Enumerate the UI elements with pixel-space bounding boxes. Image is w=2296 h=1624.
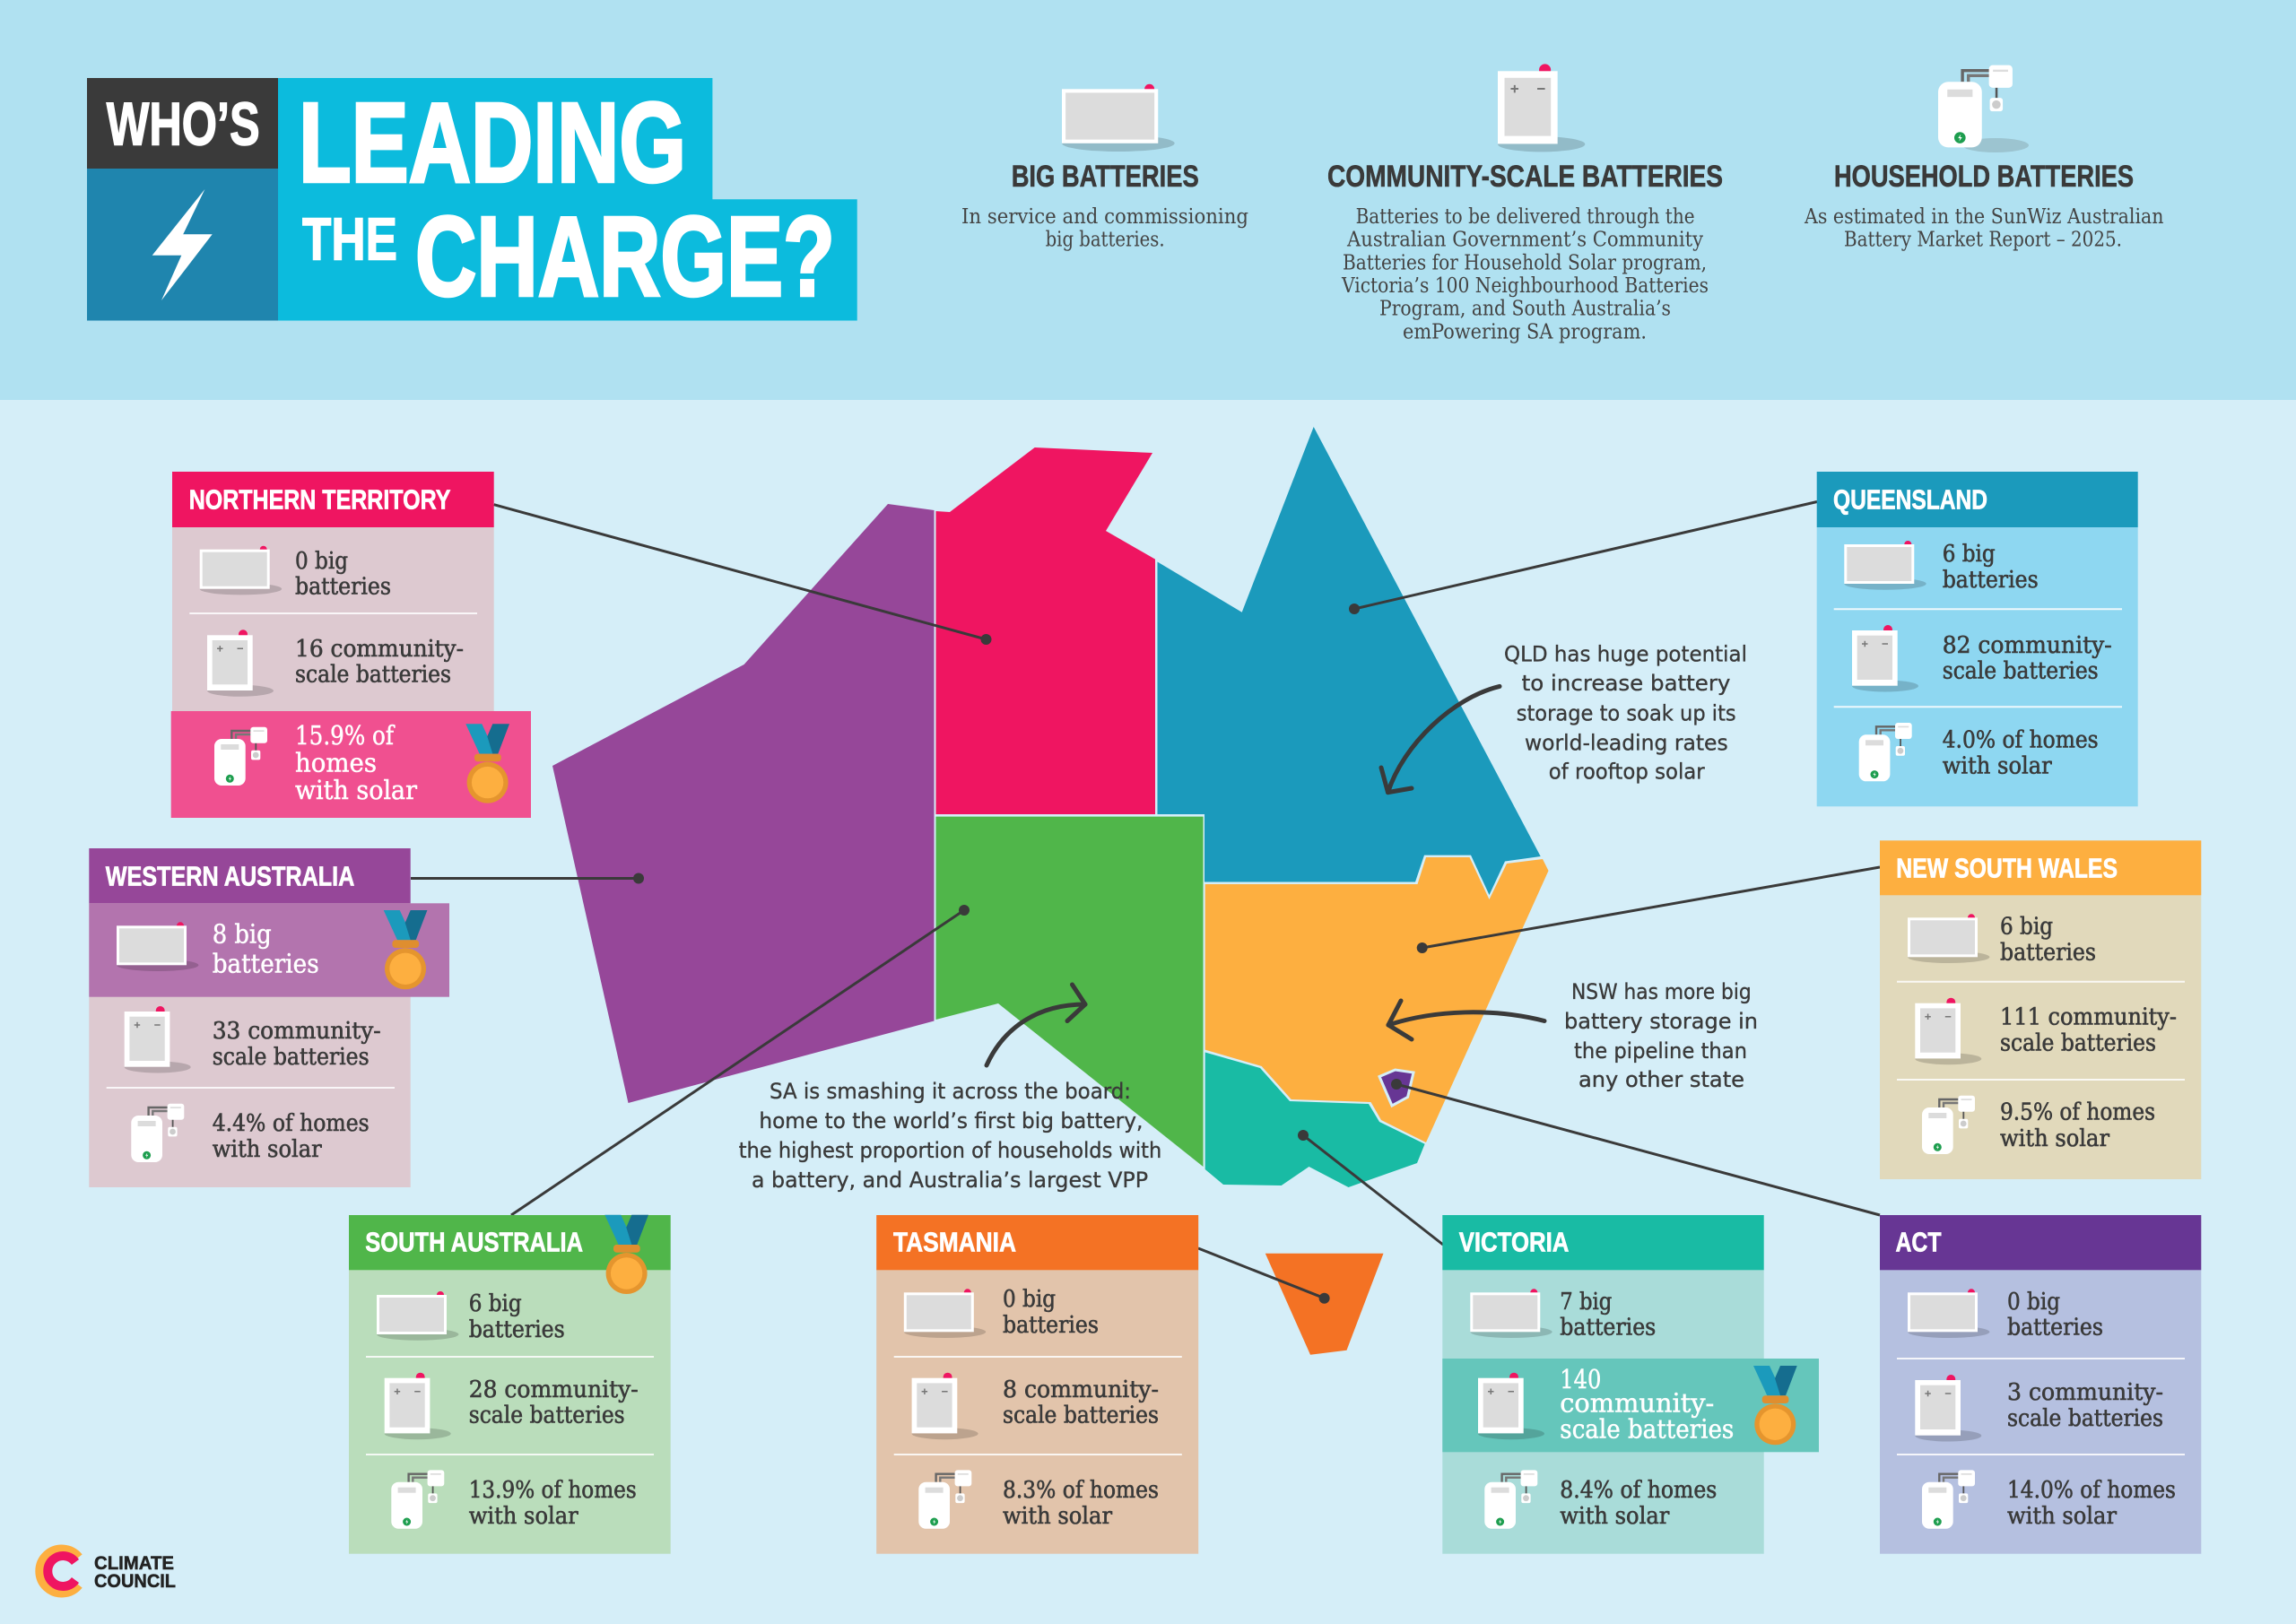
- header: [172, 472, 494, 527]
- map: Victoria: [1205, 1053, 1425, 1187]
- title: who's box: [87, 78, 278, 169]
- solar row: [1484, 1470, 1717, 1530]
- solar row: 14.0% of homes: [2007, 1477, 2176, 1504]
- big batteries row: [1470, 1289, 1656, 1342]
- solar row: 8.3% of homes: [1003, 1477, 1159, 1504]
- panel: South Australia: [349, 1215, 671, 1554]
- arrow: Queensland note: [1381, 686, 1500, 793]
- solar row: with solar: [1003, 1503, 1113, 1530]
- callout: Queensland note: of rooftop solar: [1549, 759, 1705, 784]
- legend: big batteries: [961, 84, 1248, 252]
- icon: community battery: [1498, 64, 1585, 152]
- header: [89, 848, 411, 903]
- header: [349, 1215, 671, 1270]
- logo: Climate Council: [39, 1549, 176, 1593]
- icon: medal: [465, 724, 509, 803]
- community batteries row: scale batteries: [295, 662, 451, 689]
- icon: big battery: [1062, 84, 1175, 152]
- panel: Queensland: [1817, 472, 2138, 806]
- description: As estimated in the SunWiz Australian: [1804, 205, 2164, 229]
- solar row: [1922, 1470, 2176, 1530]
- callout: South Australia note: a battery, and Australia’s largest VPP: [752, 1168, 1148, 1193]
- header: [1880, 840, 2201, 895]
- solar row: with solar: [1943, 753, 2052, 780]
- description: big batteries.: [1046, 229, 1165, 252]
- community batteries row: scale batteries: [469, 1403, 625, 1429]
- leader line: New South Wales: [1417, 867, 1880, 953]
- leader line: Victoria: [1298, 1130, 1443, 1245]
- header: NORTHERN TERRITORY: [189, 483, 451, 515]
- community batteries row: scale batteries: [1003, 1403, 1159, 1429]
- callout: Queensland note: to increase battery: [1522, 671, 1730, 696]
- title: leading the charge: CHARGE?: [415, 193, 835, 319]
- highlighted big batteries row: batteries: [213, 948, 319, 978]
- header: [1880, 1215, 2201, 1270]
- map: Northern Territory: [936, 447, 1155, 814]
- big batteries row: [1908, 1289, 2103, 1342]
- highlighted community batteries row: scale batteries: [1560, 1413, 1734, 1444]
- description: Batteries for Household Solar program,: [1343, 251, 1707, 274]
- highlighted community batteries row: 140: [1560, 1364, 1601, 1394]
- big batteries row: 6 big: [469, 1290, 522, 1317]
- panel: New South Wales: [1880, 840, 2201, 1179]
- community batteries row: scale batteries: [213, 1044, 370, 1071]
- big batteries row: 6 big: [2000, 913, 2053, 940]
- title: leading the charge: LEADING: [299, 79, 686, 205]
- leader line: South Australia: [511, 905, 970, 1215]
- solar row: 9.5% of homes: [2000, 1099, 2155, 1126]
- big batteries row: [377, 1290, 565, 1343]
- big batteries row: batteries: [469, 1316, 565, 1343]
- heading: HOUSEHOLD BATTERIES: [1834, 160, 2134, 194]
- header: SOUTH AUSTRALIA: [365, 1226, 583, 1257]
- header: [876, 1215, 1198, 1270]
- description: Australian Government’s Community: [1346, 229, 1703, 252]
- big batteries row: batteries: [1943, 567, 2039, 594]
- highlighted big batteries row: 8 big: [213, 919, 272, 950]
- callout: South Australia note: home to the world’s first big battery,: [759, 1108, 1143, 1133]
- panel: Tasmania: [876, 1215, 1198, 1554]
- icon: medal: [1753, 1366, 1797, 1445]
- highlighted community batteries row: [1442, 1359, 1819, 1452]
- community batteries row: [385, 1373, 639, 1439]
- map: Western Australia: [552, 504, 935, 1103]
- big batteries row: batteries: [2007, 1315, 2103, 1342]
- community batteries row: [1852, 625, 2112, 692]
- heading: BIG BATTERIES: [1012, 160, 1199, 194]
- community batteries row: [125, 1006, 381, 1073]
- description: Battery Market Report – 2025.: [1844, 229, 2122, 252]
- icon: household battery: [1938, 65, 2029, 152]
- leader line: ACT: [1391, 1079, 1880, 1215]
- highlighted solar row: 15.9% of: [295, 720, 396, 751]
- description: [1341, 205, 1709, 343]
- big batteries row: batteries: [2000, 939, 2096, 966]
- solar row: [1859, 723, 2099, 781]
- panel: ACT: [1880, 1215, 2201, 1554]
- callout: New South Wales note: NSW has more big: [1571, 979, 1752, 1004]
- community batteries row: 3 community-: [2007, 1379, 2163, 1406]
- legend: community-scale batteries: [1327, 64, 1723, 343]
- header: NEW SOUTH WALES: [1896, 852, 2118, 883]
- community batteries row: 16 community-: [295, 636, 464, 663]
- highlighted big batteries row: [89, 903, 449, 997]
- solar row: with solar: [213, 1136, 322, 1163]
- arrow: New South Wales note: [1388, 1001, 1544, 1039]
- big batteries row: batteries: [1560, 1315, 1656, 1342]
- solar row: [131, 1104, 370, 1163]
- logo text: CLIMATE: [94, 1552, 174, 1574]
- solar row: with solar: [469, 1503, 578, 1530]
- big batteries row: [1844, 541, 2039, 594]
- big batteries row: [1908, 913, 2096, 966]
- solar row: with solar: [2007, 1503, 2118, 1530]
- callout: Queensland note: storage to soak up its: [1517, 701, 1736, 726]
- solar row: 4.0% of homes: [1943, 726, 2099, 753]
- community batteries row: scale batteries: [2000, 1030, 2156, 1057]
- header: VICTORIA: [1459, 1226, 1569, 1257]
- big batteries row: [200, 546, 391, 601]
- callout: Queensland note: [1504, 642, 1747, 784]
- community batteries row: 28 community-: [469, 1376, 639, 1403]
- highlighted community batteries row: community-: [1560, 1388, 1714, 1419]
- header: [1817, 472, 2138, 527]
- title: who's box: WHO’S: [107, 91, 260, 159]
- highlighted solar row: with solar: [295, 775, 417, 805]
- map of Australia: [552, 427, 1548, 1355]
- callout: Queensland note: QLD has huge potential: [1504, 642, 1747, 667]
- big batteries row: 0 big: [1003, 1286, 1056, 1313]
- legend: household batteries: [1804, 65, 2164, 252]
- title: leading the charge: THE: [302, 206, 397, 274]
- callout: South Australia note: SA is smashing it across the board:: [770, 1079, 1131, 1104]
- solar row: [1922, 1096, 2155, 1154]
- solar row: 8.4% of homes: [1560, 1477, 1717, 1504]
- icon: medal: [604, 1215, 648, 1294]
- community batteries row: [207, 630, 464, 697]
- header: WESTERN AUSTRALIA: [106, 860, 354, 891]
- highlighted solar row: homes: [295, 748, 377, 778]
- header: QUEENSLAND: [1833, 483, 1987, 515]
- header: ACT: [1896, 1226, 1942, 1257]
- community batteries row: [1915, 1375, 2163, 1442]
- community batteries row: scale batteries: [1943, 658, 2099, 685]
- logo text: [94, 1552, 176, 1592]
- map: ACT: [1379, 1070, 1413, 1106]
- community batteries row: 8 community-: [1003, 1376, 1159, 1403]
- map: New South Wales: [1205, 857, 1548, 1142]
- description: Program, and South Australia’s: [1379, 298, 1671, 321]
- callout: New South Wales note: battery storage in: [1564, 1009, 1758, 1034]
- title: leading the charge: [278, 78, 857, 321]
- map: Queensland: [1157, 427, 1541, 895]
- title block: [87, 78, 857, 321]
- logo text: COUNCIL: [94, 1570, 176, 1592]
- community batteries row: [912, 1373, 1159, 1439]
- description: [1804, 205, 2164, 252]
- solar row: [391, 1470, 637, 1530]
- solar row: with solar: [2000, 1125, 2110, 1152]
- arrow: South Australia note: [987, 985, 1085, 1065]
- leader line: Western Australia: [411, 873, 644, 884]
- leader line: Northern Territory: [494, 505, 992, 645]
- icon: lightning bolt box: [87, 169, 278, 321]
- big batteries row: 7 big: [1560, 1289, 1612, 1316]
- community batteries row: 82 community-: [1943, 632, 2112, 659]
- big batteries row: [904, 1286, 1099, 1339]
- community batteries row: 111 community-: [2000, 1004, 2177, 1031]
- callout: New South Wales note: any other state: [1578, 1067, 1744, 1092]
- panel: Western Australia: [89, 848, 449, 1187]
- solar row: with solar: [1560, 1503, 1670, 1530]
- community batteries row: scale batteries: [2007, 1405, 2163, 1432]
- description: Victoria’s 100 Neighbourhood Batteries: [1341, 274, 1709, 298]
- community batteries row: [1915, 998, 2177, 1064]
- solar row: [918, 1470, 1159, 1530]
- big batteries row: batteries: [295, 574, 391, 601]
- description: In service and commissioning: [961, 205, 1248, 229]
- map: Tasmania: [1265, 1254, 1383, 1355]
- big batteries row: 0 big: [2007, 1289, 2060, 1316]
- callout: Queensland note: world-leading rates: [1525, 730, 1728, 755]
- panel: Northern Territory: [171, 472, 531, 818]
- panel: Victoria: [1442, 1215, 1819, 1554]
- callout: South Australia note: the highest proportion of households with: [739, 1138, 1161, 1163]
- highlighted solar row: [171, 711, 531, 818]
- description: Batteries to be delivered through the: [1356, 205, 1695, 229]
- header: [1442, 1215, 1764, 1270]
- community batteries row: 33 community-: [213, 1018, 381, 1045]
- icon: medal: [384, 910, 427, 989]
- header: TASMANIA: [893, 1226, 1016, 1257]
- big batteries row: 0 big: [295, 548, 348, 575]
- callout: New South Wales note: [1564, 979, 1758, 1092]
- description: emPowering SA program.: [1403, 320, 1647, 343]
- heading: COMMUNITY-SCALE BATTERIES: [1327, 160, 1723, 194]
- icon: logo mark: [39, 1549, 79, 1593]
- big batteries row: batteries: [1003, 1312, 1099, 1339]
- callout: New South Wales note: the pipeline than: [1574, 1038, 1747, 1064]
- leader line: Queensland: [1349, 502, 1817, 614]
- solar row: 4.4% of homes: [213, 1110, 370, 1137]
- big batteries row: 6 big: [1943, 541, 1996, 568]
- leader line: Tasmania: [1198, 1248, 1330, 1304]
- header band: [0, 0, 2296, 400]
- solar row: 13.9% of homes: [469, 1477, 637, 1504]
- description: [961, 205, 1248, 252]
- callout: South Australia note: [739, 1079, 1161, 1193]
- map: South Australia: [936, 817, 1204, 1167]
